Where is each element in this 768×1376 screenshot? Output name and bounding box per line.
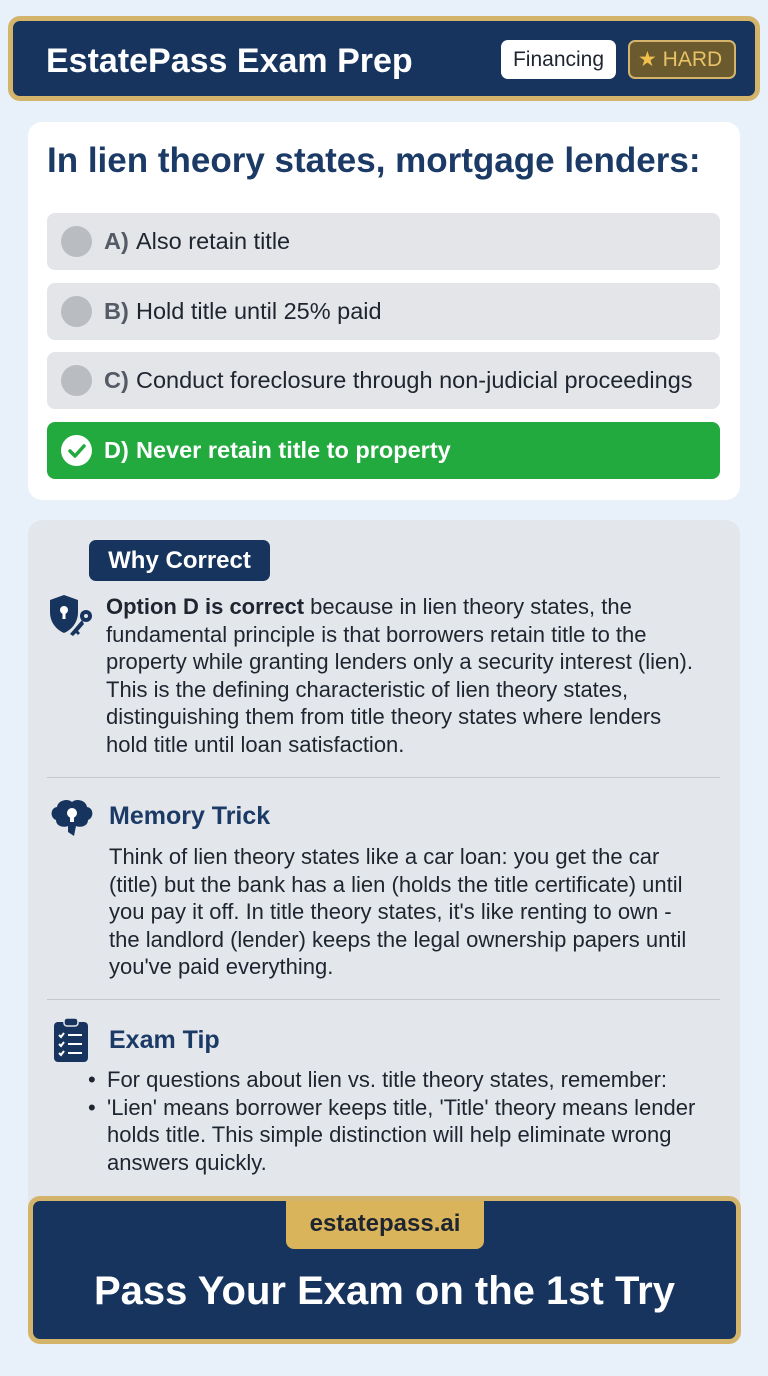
why correct text: hold title until loan satisfaction.	[106, 732, 404, 756]
option D correct	[47, 422, 720, 479]
exam tip bullets	[88, 1067, 695, 1174]
option C	[47, 352, 720, 409]
explanation panel	[28, 520, 740, 1220]
memory trick text: you've paid everything.	[109, 954, 333, 979]
exam tip bullets: •	[88, 1067, 96, 1092]
tagline: Pass Your Exam on the 1st Try	[94, 1269, 675, 1313]
why correct tag: Why Correct	[108, 547, 251, 574]
memory trick text: Think of lien theory states like a car loan: you get the car	[109, 844, 659, 869]
option B: B)	[104, 298, 129, 324]
why correct text: distinguishing them from title theory states where lenders	[106, 704, 661, 729]
option A: Also retain title	[136, 228, 290, 254]
memory trick text: you pay it off. In title theory states, it's like renting to own -	[109, 899, 672, 924]
option D correct: Never retain title to property	[136, 437, 451, 463]
exam tip bullets: holds title. This simple distinction will help eliminate wrong	[107, 1122, 672, 1147]
icon: clipboard	[54, 1018, 88, 1062]
tag: Financing: Financing	[513, 48, 604, 71]
option A: A)	[104, 228, 129, 254]
tag: HARD: ★ HARD	[638, 48, 722, 71]
question card	[28, 122, 740, 500]
memory trick heading: Memory Trick	[109, 802, 270, 830]
exam tip heading: Exam Tip	[109, 1026, 220, 1054]
option B	[47, 283, 720, 340]
url pill	[286, 1201, 484, 1249]
option D correct: D)	[104, 437, 129, 463]
memory trick text	[109, 844, 686, 979]
exam tip bullets: •	[88, 1094, 96, 1120]
option A	[47, 213, 720, 270]
footer banner	[28, 1196, 741, 1344]
why correct text	[106, 594, 693, 756]
url pill: estatepass.ai	[310, 1210, 460, 1237]
title: EstatePass Exam Prep	[46, 42, 413, 80]
why correct text: Option D is correct because in lien theory states, the	[106, 594, 632, 619]
option C: C)	[104, 367, 129, 393]
option C: Conduct foreclosure through non-judicial proceedings	[136, 367, 693, 393]
icon: brain bulb	[52, 800, 92, 836]
tag: HARD	[628, 40, 736, 79]
why correct text: property while granting lenders only a security interest (lien).	[106, 649, 693, 674]
memory trick text: the landlord (lender) keeps the legal ownership papers until	[109, 926, 686, 952]
option B: Hold title until 25% paid	[136, 298, 382, 324]
memory trick text: (title) but the bank has a lien (holds the title certificate) until	[109, 872, 683, 896]
icon: shield key	[50, 595, 92, 636]
exam tip bullets: answers quickly.	[107, 1150, 267, 1174]
why correct tag	[89, 540, 270, 581]
tag: Financing	[501, 40, 616, 79]
why correct text: This is the defining characteristic of lien theory states,	[106, 676, 628, 702]
exam tip bullets: For questions about lien vs. title theory states, remember:	[107, 1067, 667, 1092]
question: In lien theory states, mortgage lenders:	[47, 141, 700, 180]
why correct text: fundamental principle is that borrowers retain title to the	[106, 622, 647, 646]
exam tip bullets: 'Lien' means borrower keeps title, 'Title' theory means lender	[107, 1094, 695, 1120]
header	[8, 16, 760, 101]
